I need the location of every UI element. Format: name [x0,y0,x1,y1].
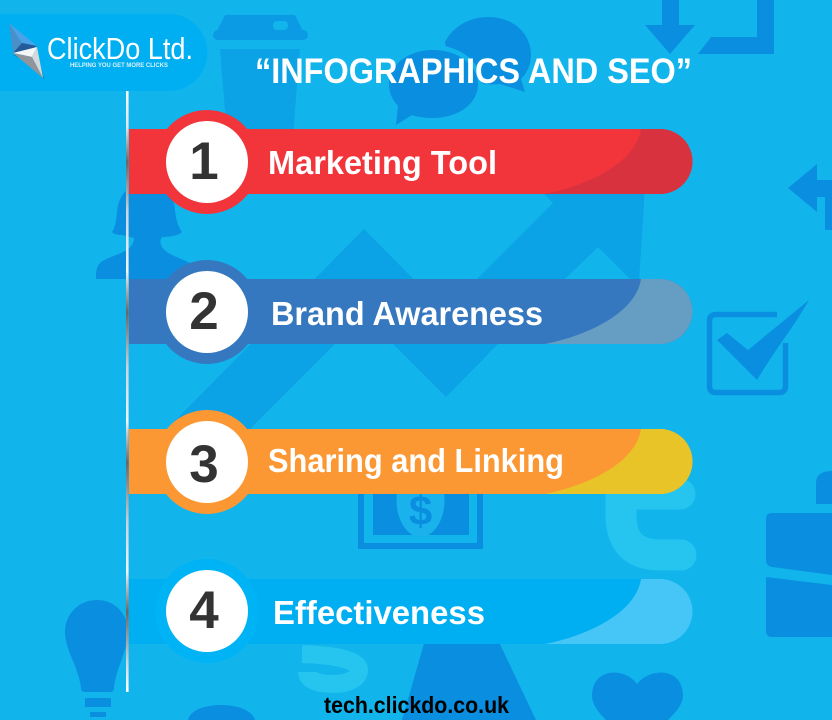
icon: person [96,183,200,279]
chart: rising zigzag arrow [165,140,648,431]
icon: triangle [402,640,536,720]
icon: left arrow [788,164,832,230]
panel: item 4 effectiveness: Effectiveness [273,594,485,631]
panel: item 3 sharing and linking: Sharing and Linking [268,442,564,479]
icon: dome [188,705,255,720]
icon: twitter letter [621,480,681,555]
panel: item 2 brand awareness: Brand Awareness [271,295,543,332]
icon: briefcase [766,471,832,637]
icon: dollar sign [302,654,359,684]
panel: item 2 brand awareness [129,260,692,364]
vertical rule [126,91,129,692]
logo band [0,14,207,91]
logo tagline: HELPING YOU GET MORE CLICKS [70,62,169,69]
icon: speech bubbles [384,17,531,125]
icon: light bulb [65,600,128,717]
panel: item 3 sharing and linking [129,410,692,514]
title: “INFOGRAPHICS AND SEO” [255,52,692,91]
website url: tech.clickdo.co.uk [324,692,509,718]
icon: top right arrow [645,0,774,54]
icon: heart [592,672,683,720]
panel: item 1 marketing tool [129,110,692,214]
icon: checkbox [710,300,809,392]
panel: item 3 sharing and linking: 3 [189,435,219,494]
panel: item 1 marketing tool: Marketing Tool [268,144,497,181]
logo name: ClickDo Ltd. [47,31,193,66]
icon: dollar bill: $ [409,487,432,534]
icon: dollar bill [361,463,480,546]
icon: coffee cup [213,15,308,135]
panel: item 4 effectiveness [129,559,692,663]
panel: item 4 effectiveness: 4 [189,581,219,640]
icon: logo gem [9,23,45,80]
panel: item 2 brand awareness: 2 [189,282,219,341]
panel: item 1 marketing tool: 1 [189,132,219,191]
